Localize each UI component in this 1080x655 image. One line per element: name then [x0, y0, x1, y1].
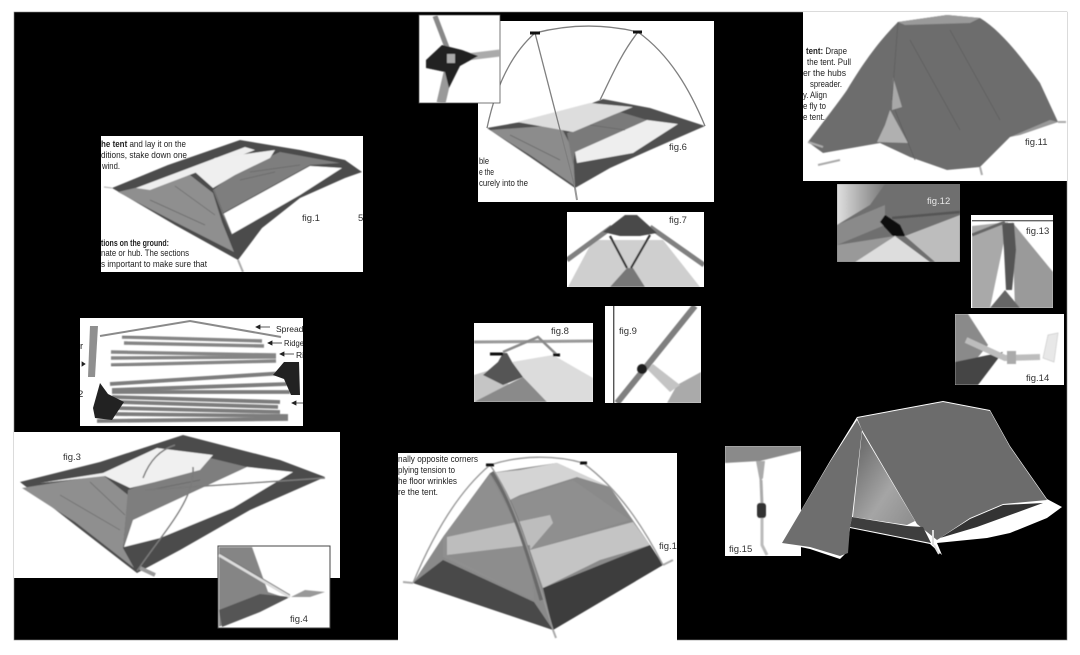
label fig.7: fig.7 [669, 215, 687, 226]
text: fly step block: e fly to [803, 101, 826, 112]
tent floor fig.6 [487, 99, 705, 188]
label fig.14: fig.14 [1026, 373, 1049, 384]
text: step two block: nate or hub. The sections [101, 248, 189, 259]
tent fly fig.11 [808, 15, 1066, 175]
label fig.3: fig.3 [63, 452, 81, 463]
tent body fig.10 [403, 457, 673, 638]
panel: fig.13 photo detail [971, 215, 1053, 308]
panel: finished tent with fly [782, 401, 1062, 559]
text: step block at fig.10: plying tension to [398, 465, 455, 476]
text: step block at fig.10 [398, 454, 478, 498]
panel: fig.12 photo detail [837, 184, 960, 262]
door opening [853, 432, 915, 525]
label fig.12: fig.12 [927, 196, 950, 207]
poles fig.10 [413, 457, 663, 630]
ridge poles [111, 337, 276, 365]
text: step block at fig.6: e the [479, 167, 494, 178]
sleeve tube [88, 326, 98, 377]
text: fly step block: e tent. [803, 112, 825, 123]
panel: fig.8 spreader detail [474, 323, 593, 402]
panel: fig.11 fly draped tent [803, 12, 1067, 181]
label fig.11: fig.11 [1025, 137, 1048, 148]
panel: fig.6 poles raised [478, 21, 714, 202]
panel: fig.9 pole clip detail [605, 306, 701, 403]
text: fly step block: the tent. Pull [807, 57, 851, 68]
panel: fig.4 inset pole tip [218, 546, 330, 628]
text: fly step block [803, 46, 851, 123]
label fig.9: fig.9 [619, 326, 637, 337]
label sleeve: r [80, 341, 83, 352]
tent floor fig.1 [104, 140, 362, 272]
panel: fig.5 inset hub [419, 15, 500, 103]
label hub: 2 [78, 389, 83, 400]
text: fly step block: spreader. [810, 79, 842, 90]
label fig.10: fig.1 [659, 541, 677, 552]
under fly band [937, 503, 1043, 540]
panel: fig.15 stake cord detail [725, 446, 801, 556]
label ridge: Ridge [284, 338, 304, 348]
label fig.1: fig.1 [302, 213, 320, 224]
fly body [857, 402, 1047, 540]
text: step one, first block: ditions, stake down one [101, 150, 187, 161]
stake front [933, 530, 939, 554]
tent floor fig.3 [20, 435, 325, 573]
inner floor edge [850, 517, 931, 543]
text: fly step block: y. Align [803, 90, 827, 101]
text: step block at fig.6 [479, 156, 528, 189]
front vestibule flap [782, 420, 862, 556]
poles fig.6 [487, 26, 705, 188]
text: step two block: s important to make sure that [101, 259, 207, 270]
text: step block at fig.10: he floor wrinkles [398, 476, 457, 487]
panel: fig.10 inner tent [398, 453, 677, 641]
label fig.4: fig.4 [290, 614, 308, 625]
white halo [782, 401, 1062, 559]
hub right [273, 362, 300, 395]
poles fig.3 [137, 445, 325, 571]
label spreader: Spreader [276, 324, 311, 334]
panel: fig.1 unpacked tent floor [101, 136, 363, 272]
hubbed poles [97, 373, 290, 421]
panel: fig.3 pole on floor [14, 432, 340, 578]
panel: fig.7 hub detail [567, 212, 704, 287]
text: step one, first block: wind. [101, 161, 120, 172]
label fig.8: fig.8 [551, 326, 569, 337]
label ridge cut: Ri [296, 350, 304, 360]
text: step two block [101, 238, 207, 270]
text: step block at fig.6: ble [479, 156, 489, 167]
text: fly step block: er the hubs [803, 68, 846, 79]
text: step one, first block [101, 140, 187, 169]
arrows and pole names [82, 325, 303, 405]
spreader pole [100, 321, 281, 337]
panel: fig.14 guyline detail [955, 314, 1064, 385]
panel: fig.2 pole set [78, 318, 311, 426]
label fig.13: fig.13 [1026, 226, 1049, 237]
page number: 5 [358, 213, 363, 224]
label fig.15: fig.15 [729, 544, 752, 555]
text: fly step block: tent: Drape [806, 46, 847, 57]
text: step one, first block: he tent and lay it on the [101, 139, 186, 150]
hub left [93, 383, 124, 420]
text: step block at fig.10: re the tent. [398, 487, 438, 498]
label fig.6: fig.6 [669, 142, 687, 153]
text: step block at fig.6: curely into the [479, 178, 528, 189]
text: step block at fig.10: nally opposite corners [398, 454, 478, 465]
text: step two block: tions on the ground: [101, 238, 169, 249]
